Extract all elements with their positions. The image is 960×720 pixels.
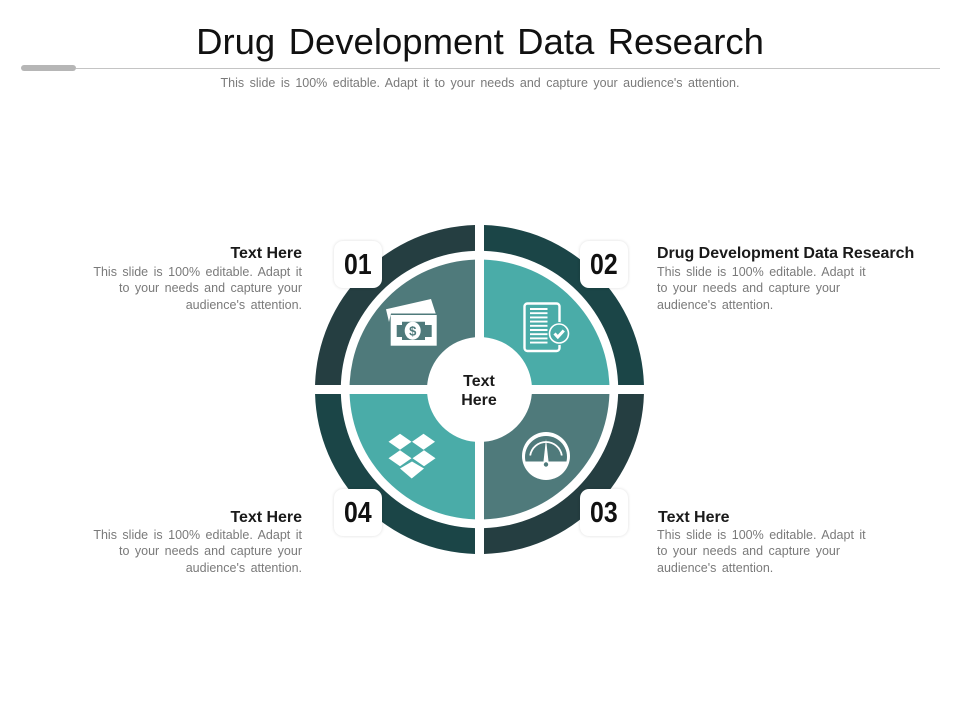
text block 01: [93, 245, 302, 312]
badge 03: 03: [590, 497, 618, 529]
badge 04: [334, 489, 382, 536]
segment 02: [484, 225, 644, 385]
text block 04: [93, 509, 302, 575]
icon: document with check: [524, 304, 570, 351]
segment 04: [315, 394, 475, 554]
text block 02: This slide is 100% editable. Adapt it: [657, 265, 866, 279]
badge 01: [334, 241, 382, 288]
text block 02: to your needs and capture your: [657, 281, 840, 295]
badge 04: 04: [344, 497, 372, 529]
icon: gauge: [522, 432, 570, 480]
segment 03: [484, 394, 644, 554]
text block 04: Text Here: [230, 509, 302, 526]
text block 04: audience's attention.: [186, 561, 302, 575]
subtitle: This slide is 100% editable. Adapt it to your needs and capture your audience's attention.: [221, 76, 739, 90]
text block 02: audience's attention.: [657, 298, 773, 312]
center label: Here: [461, 392, 497, 408]
icon: money: $: [409, 324, 417, 338]
badge 01: 01: [344, 249, 372, 281]
text block 03: to your needs and capture your: [657, 544, 840, 558]
text block 03: Text Here: [658, 509, 730, 526]
badge 02: 02: [590, 249, 618, 281]
text block 01: This slide is 100% editable. Adapt it: [93, 265, 302, 279]
icon: money: [386, 299, 437, 346]
badge 02: [580, 241, 628, 288]
title rule: [21, 65, 940, 71]
text block 03: audience's attention.: [657, 561, 773, 575]
text block 04: to your needs and capture your: [119, 544, 302, 558]
center label: Text: [463, 372, 495, 390]
text block 02: [657, 245, 914, 312]
segment 01: [315, 225, 475, 385]
text block 03: This slide is 100% editable. Adapt it: [657, 528, 866, 542]
text block 01: to your needs and capture your: [119, 281, 302, 295]
center label: [461, 372, 497, 408]
text block 02: Drug Development Data Research: [657, 245, 914, 262]
text block 03: [657, 509, 866, 575]
title: Drug Development Data Research: [196, 21, 764, 62]
badge 03: [580, 489, 628, 536]
text block 04: This slide is 100% editable. Adapt it: [93, 528, 302, 542]
icon: open box: [388, 434, 436, 478]
text block 01: Text Here: [230, 245, 302, 262]
text block 01: audience's attention.: [186, 298, 302, 312]
